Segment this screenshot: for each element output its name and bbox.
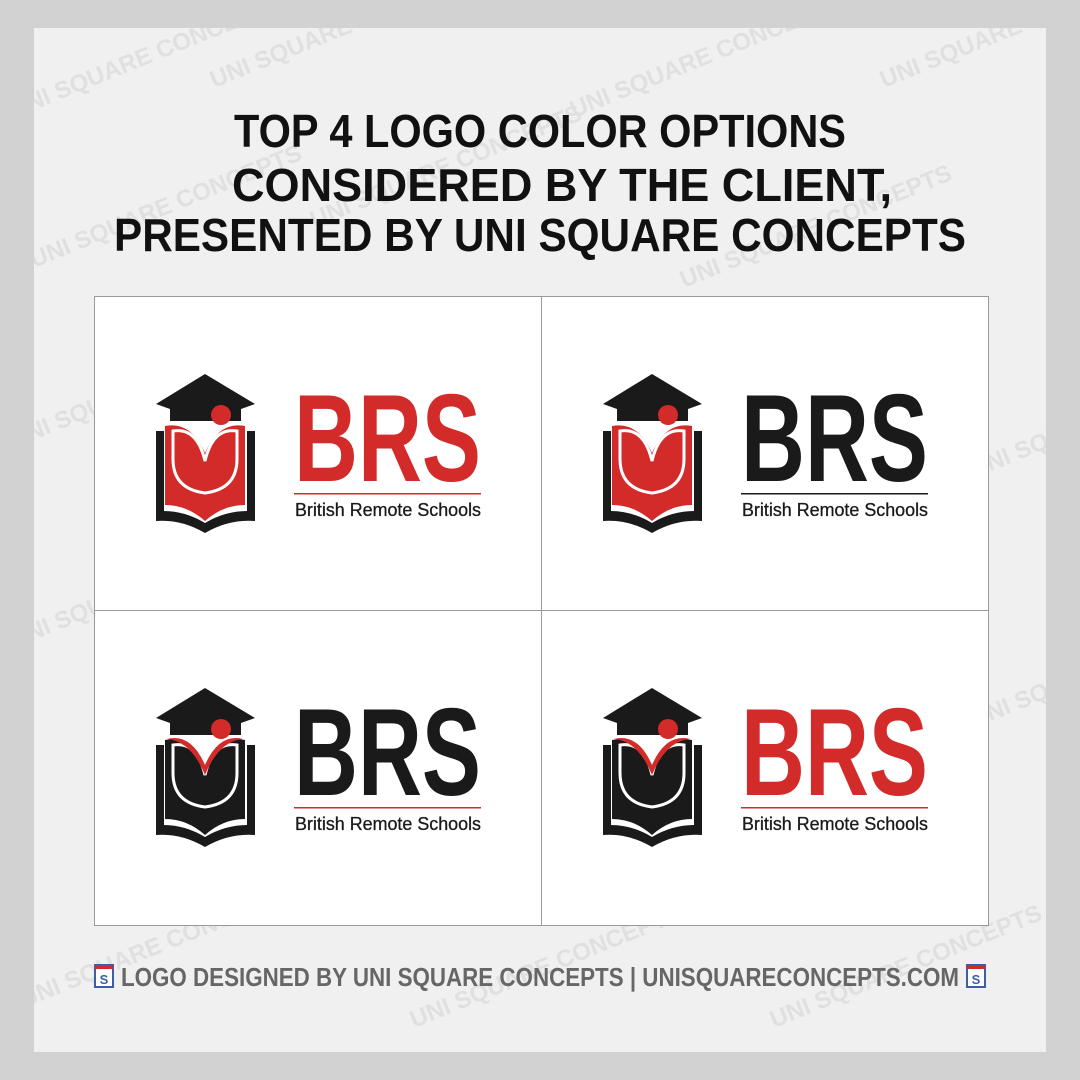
panel: logo option 3 black: British Remote Schools (295, 814, 481, 834)
panel: logo option 2 red icon black text (541, 296, 989, 611)
panel: logo option 4 black icon red text (541, 610, 989, 926)
title: PRESENTED BY UNI SQUARE CONCEPTS (114, 209, 966, 260)
background frame: UNI SQUARE CONCEPTS (766, 900, 1046, 1034)
background frame: UNI SQUARE CONCEPTS (676, 160, 956, 294)
panel: logo option 4 black icon red text: British Remote Schools (742, 814, 928, 834)
title: CONSIDERED BY THE CLIENT, (232, 159, 892, 211)
icon: right logo: S (972, 972, 981, 987)
panel: logo option 1 red: British Remote Schools (295, 500, 481, 520)
background frame: UNI SQUARE CONCEPTS (406, 900, 686, 1034)
footer: LOGO DESIGNED BY UNI SQUARE CONCEPTS | UNISQUARECONCEPTS.COM (121, 962, 959, 992)
panel: logo option 2 red icon black text: British Remote Schools (742, 500, 928, 520)
title (114, 105, 966, 260)
icon: left logo: S (100, 972, 109, 987)
background frame: UNI SQUARE CONCEPTS (306, 100, 586, 234)
panel: logo option 1 red (94, 296, 542, 611)
icon: left logo (95, 965, 113, 987)
icon: right logo (967, 965, 985, 987)
panel: logo option 3 black (94, 610, 542, 926)
title: TOP 4 LOGO COLOR OPTIONS (234, 105, 846, 157)
background frame: UNI SQUARE CONCEPTS (34, 140, 306, 274)
